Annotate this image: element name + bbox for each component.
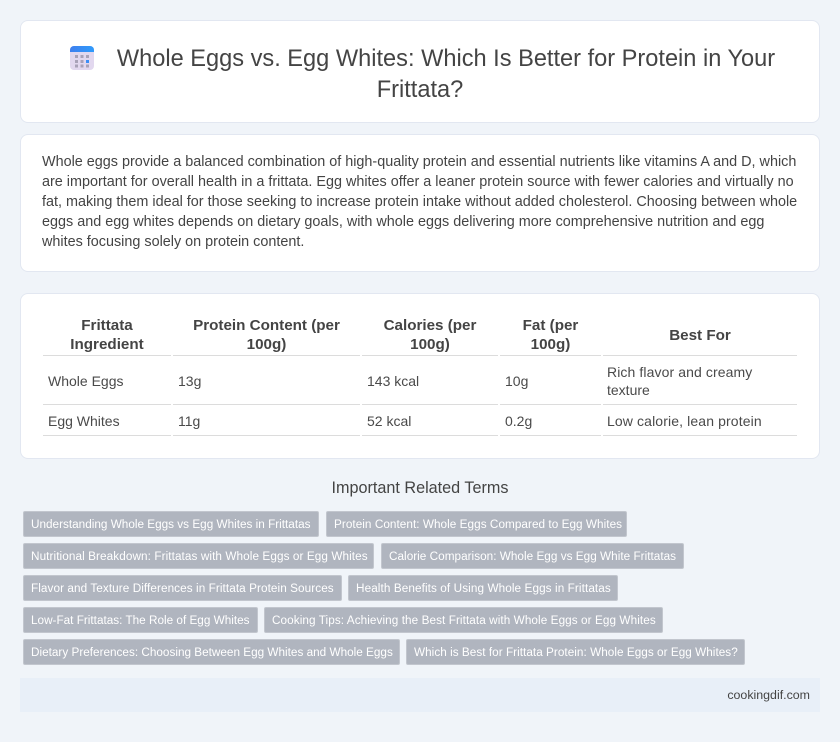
related terms tags: Dietary Preferences: Choosing Between Egg Whites and Whole Eggs: [31, 646, 393, 659]
text block: description: Whole eggs provide a balanced combination of high-quality protein and essential nutrients like vitamins A and D, which: [42, 154, 796, 170]
related terms tags: Calorie Comparison: Whole Egg vs Egg White Frittatas: [389, 550, 676, 563]
table header: protein content: [193, 317, 340, 353]
panel: description: [20, 134, 820, 272]
footer bar: [20, 678, 820, 712]
related terms tags: Health Benefits of Using Whole Eggs in Frittatas: [356, 582, 611, 595]
footer: site name: cookingdif.com: [727, 688, 810, 702]
table header: frittata ingredient: Ingredient: [70, 336, 144, 353]
table header: protein content: Protein Content (per: [193, 317, 340, 334]
panel: comparison table: [20, 293, 820, 459]
table row: egg whites: 52 kcal: [367, 413, 411, 429]
text block: description: eggs and egg whites depends on dietary goals, with whole eggs delivering more comprehensive nutrition and egg: [42, 214, 764, 230]
table row: whole eggs: 10g: [505, 373, 528, 389]
related terms tags: Flavor and Texture Differences in Frittata Protein Sources: [31, 582, 334, 595]
table header: best for: Best For: [669, 327, 731, 344]
table header: frittata ingredient: Frittata: [81, 317, 133, 334]
related terms tags: Protein Content: Whole Eggs Compared to Egg Whites: [334, 518, 622, 531]
table header: calories: [384, 317, 476, 353]
title line 2: Frittata?: [377, 77, 463, 103]
text block: description: [42, 154, 797, 250]
related terms tags: Cooking Tips: Achieving the Best Frittata with Whole Eggs or Egg Whites: [272, 614, 656, 627]
table header: calories: Calories (per: [384, 317, 476, 334]
table header: protein content: 100g): [247, 336, 286, 353]
title: Whole Eggs vs. Egg Whites: Which Is Better for Protein in Your: [117, 46, 775, 72]
table header: fat: [523, 317, 578, 353]
related terms tags: [23, 511, 745, 665]
panel: header: [20, 20, 820, 123]
table row: whole eggs: Rich flavor and creamy: [607, 364, 752, 380]
table row: egg whites: 11g: [178, 413, 200, 429]
table header: frittata ingredient: [70, 317, 144, 353]
table row: whole eggs: 13g: [178, 373, 201, 389]
heading: related terms: Important Related Terms: [332, 479, 508, 497]
table row: egg whites: [48, 413, 762, 429]
table row: egg whites: Low calorie, lean protein: [607, 413, 762, 429]
table header: fat: 100g): [531, 336, 570, 353]
table header: fat: Fat (per: [523, 317, 578, 334]
table row: whole eggs: [48, 364, 752, 398]
related terms tags: Which is Best for Frittata Protein: Whole Eggs or Egg Whites?: [414, 646, 738, 659]
table row: egg whites: 0.2g: [505, 413, 532, 429]
table header: calories: 100g): [410, 336, 450, 353]
text block: description: are important for overall health in a frittata. Egg whites offer a leaner protein source with fewer calories and virtually no: [42, 174, 794, 190]
table row: whole eggs: texture: [607, 382, 650, 398]
related terms tags: Nutritional Breakdown: Frittatas with Whole Eggs or Egg Whites: [31, 550, 368, 563]
text block: description: fat, making them ideal for those seeking to increase protein intake without added cholesterol. Choosing between whole: [42, 194, 797, 210]
table row: whole eggs: Whole Eggs: [48, 373, 123, 389]
related terms tags: Low-Fat Frittatas: The Role of Egg Whites: [31, 614, 250, 627]
table row: whole eggs: 143 kcal: [367, 373, 419, 389]
table row: egg whites: Egg Whites: [48, 413, 120, 429]
text block: description: whites focusing solely on protein content.: [42, 234, 304, 250]
related terms tags: Understanding Whole Eggs vs Egg Whites in Frittatas: [31, 518, 311, 531]
icon: calendar: [70, 46, 94, 70]
